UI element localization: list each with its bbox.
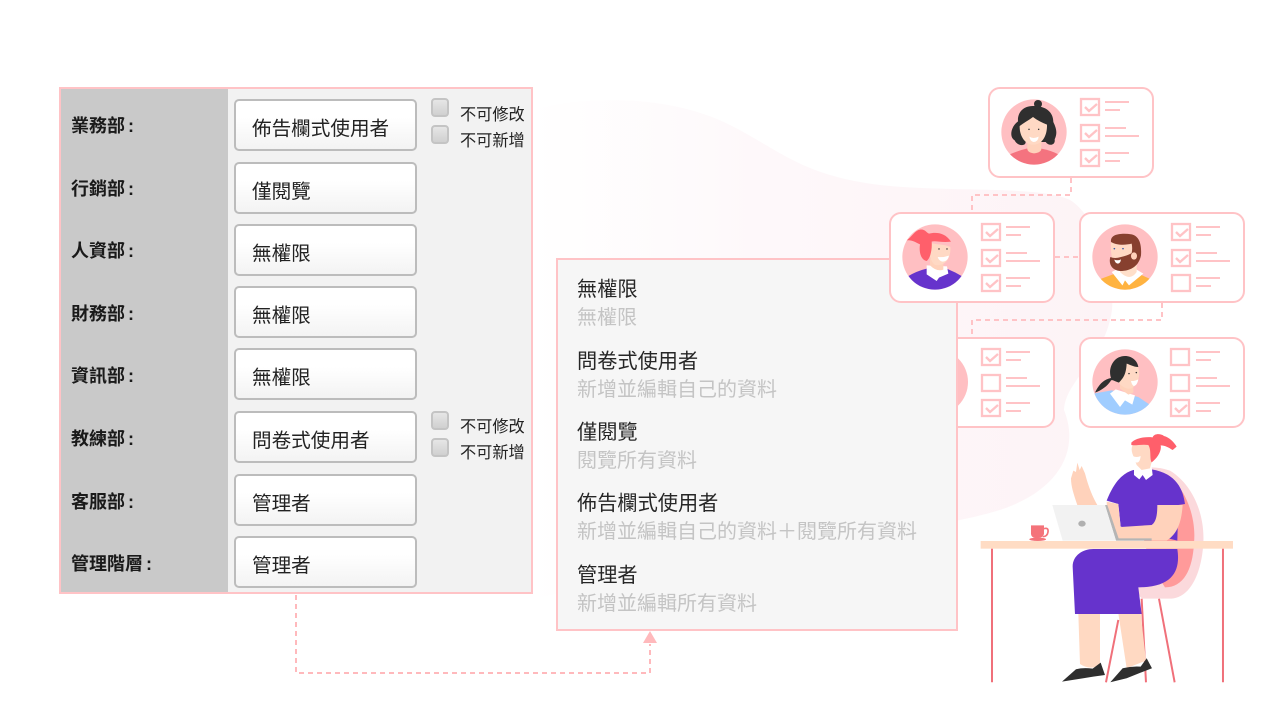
foreground illustration layer <box>295 87 1245 682</box>
role selector: 教練部: 問卷式使用者 <box>252 430 370 452</box>
smile <box>1133 456 1141 463</box>
checkbox <box>431 98 449 117</box>
label column <box>61 89 228 592</box>
arms <box>1107 502 1183 541</box>
role selector: 客服部: 管理者 <box>252 493 311 515</box>
department label: 財務部: 財務部: <box>71 304 134 324</box>
coffee cup <box>1029 525 1048 541</box>
department label: 資訊部: 資訊部: <box>71 366 134 386</box>
laptop <box>1052 505 1152 541</box>
illustration: woman working at a laptop <box>981 434 1233 682</box>
department label: 教練部: 教練部: <box>71 429 134 449</box>
checklist <box>982 224 1040 291</box>
department label: 業務部: 業務部: <box>71 116 134 136</box>
role selector: 人資部 <box>234 224 417 276</box>
role selector: 教練部 <box>234 411 417 463</box>
avatar: woman with dark hair <box>1001 99 1067 165</box>
role card: bearded man <box>1080 213 1244 302</box>
panel: role descriptions <box>556 258 958 631</box>
role description: 新增並編輯自己的資料＋閱覽所有資料 <box>577 521 917 543</box>
role title: 管理者 <box>577 565 638 587</box>
role selector: 財務部: 無權限 <box>252 305 311 327</box>
checkbox label: 不可新增 <box>460 444 525 462</box>
legs <box>1078 613 1146 668</box>
role description: 新增並編輯自己的資料 <box>577 379 777 401</box>
org chart connectors <box>972 178 1162 337</box>
checkbox label: 不可修改 <box>460 418 525 436</box>
role description: 閱覽所有資料 <box>577 450 697 472</box>
checkbox <box>431 125 449 144</box>
role selector: 財務部 <box>234 286 417 338</box>
role title: 僅閱覽 <box>577 422 638 444</box>
torso <box>1107 469 1185 541</box>
role selector: 業務部 <box>234 99 417 151</box>
checkbox <box>431 438 449 457</box>
department label: 人資部: 人資部: <box>71 241 134 261</box>
role description: 新增並編輯所有資料 <box>577 593 757 615</box>
checkbox <box>431 411 449 430</box>
role selector: 資訊部 <box>234 348 417 400</box>
role card: woman with red hair <box>890 213 1054 302</box>
chair <box>1106 467 1203 682</box>
collar <box>1134 467 1153 480</box>
avatar: bearded man <box>1092 224 1158 290</box>
department label: 客服部: 客服部: <box>71 492 134 512</box>
role selector: 資訊部: 無權限 <box>252 367 311 389</box>
raised hand <box>1071 463 1097 505</box>
role selector: 人資部: 無權限 <box>252 243 311 265</box>
checkbox label: 不可修改 <box>460 106 525 124</box>
department label: 行銷部: 行銷部: <box>71 179 134 199</box>
arrow: form to role descriptions <box>296 595 657 673</box>
role title: 問卷式使用者 <box>577 351 698 373</box>
panel: department permission form <box>59 87 533 594</box>
role card: woman with ponytail <box>1080 338 1244 427</box>
role selector: 業務部: 佈告欄式使用者 <box>252 118 389 140</box>
role title: 佈告欄式使用者 <box>577 493 718 515</box>
role title: 無權限 <box>577 279 638 301</box>
role selector: 行銷部: 僅閱覽 <box>252 181 311 203</box>
avatar: red-haired woman <box>902 224 968 290</box>
role selector: 客服部 <box>234 474 417 526</box>
skirt <box>1073 549 1178 614</box>
desk top <box>981 541 1233 549</box>
hair <box>1131 434 1177 462</box>
checklist <box>1171 349 1230 416</box>
role selector: 管理階層 <box>234 536 417 588</box>
role selector: 管理階層: 管理者 <box>252 555 311 577</box>
role card: top manager <box>989 88 1153 177</box>
desk legs <box>992 549 1223 682</box>
checkbox label: 不可新增 <box>460 132 525 150</box>
role description: 無權限 <box>577 307 637 329</box>
role selector: 行銷部 <box>234 162 417 214</box>
department label: 管理階層: 管理階層: <box>71 554 152 574</box>
avatar: ponytail woman <box>1092 349 1158 415</box>
checklist <box>1081 99 1139 166</box>
neck and face <box>1132 442 1153 470</box>
checklist <box>1172 224 1230 291</box>
shoes <box>1062 658 1152 682</box>
